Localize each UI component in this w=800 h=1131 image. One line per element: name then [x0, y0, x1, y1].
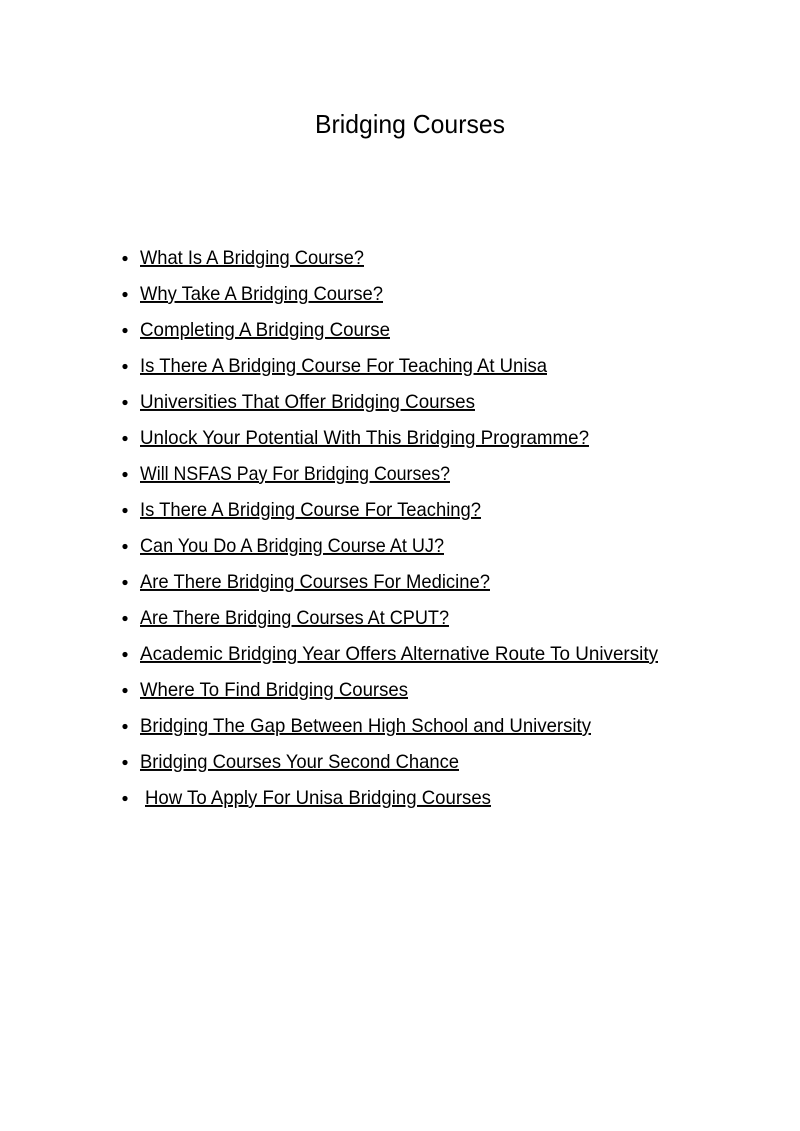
list item: second chance: Bridging Courses Your Second Chance — [140, 751, 459, 773]
list item: how to apply: How To Apply For Unisa Bridging Courses — [145, 787, 491, 809]
title: Bridging Courses — [315, 109, 505, 139]
list item: medicine: Are There Bridging Courses For Medicine? — [140, 571, 490, 593]
list item: completing: Completing A Bridging Course — [140, 319, 390, 341]
list item: unlock potential: Unlock Your Potential With This Bridging Programme? — [140, 427, 589, 449]
list item: what is: What Is A Bridging Course? — [140, 247, 364, 269]
list item: where to find: Where To Find Bridging Courses — [140, 679, 408, 701]
list item: academic bridging year: Academic Bridging Year Offers Alternative Route To University — [140, 643, 658, 665]
list item: bridging the gap: Bridging The Gap Between High School and University — [140, 715, 591, 737]
list item: UJ: Can You Do A Bridging Course At UJ? — [140, 535, 444, 557]
list item: universities: Universities That Offer Bridging Courses — [140, 391, 475, 413]
list item: teaching: Is There A Bridging Course For Teaching? — [140, 499, 481, 521]
list of bridging course topics — [122, 247, 658, 809]
list item: CPUT: Are There Bridging Courses At CPUT? — [140, 607, 449, 629]
list item: teaching at Unisa: Is There A Bridging Course For Teaching At Unisa — [140, 355, 547, 377]
list item: why take: Why Take A Bridging Course? — [140, 283, 383, 305]
list item: NSFAS: Will NSFAS Pay For Bridging Courses? — [140, 463, 450, 485]
